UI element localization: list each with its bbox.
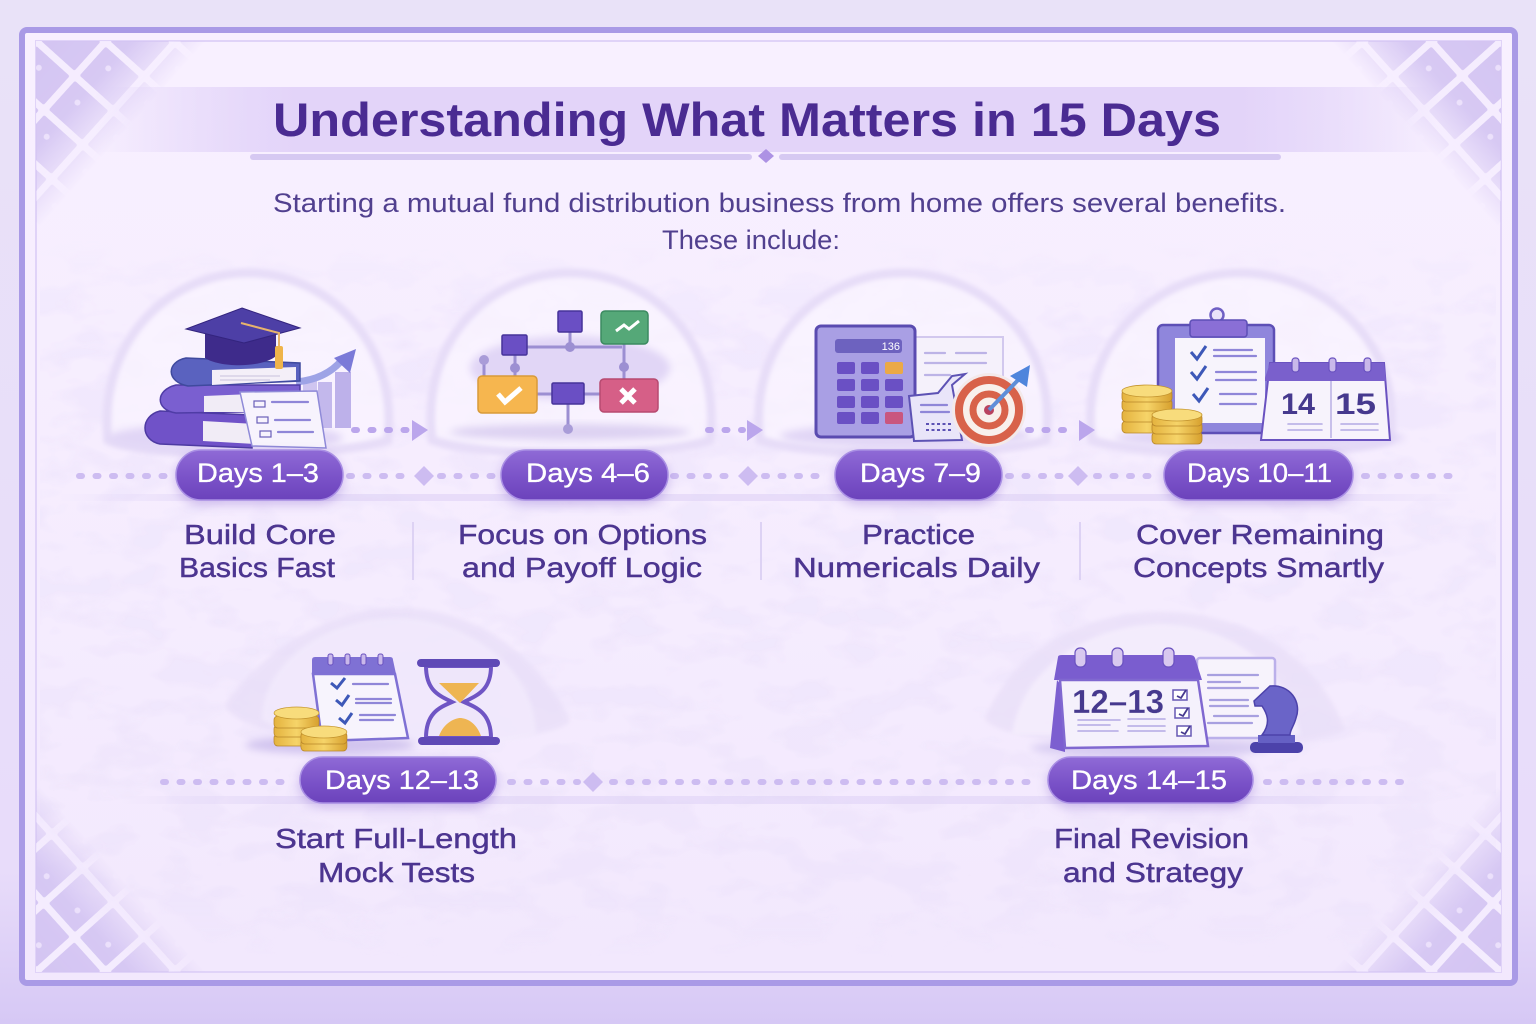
icon: coin stacks (1122, 385, 1202, 444)
pill: days 7-9 (835, 450, 1002, 500)
pill: days 7-9: Days 7–9 (860, 458, 981, 488)
icon: small note (909, 374, 965, 441)
icon: calendar 14 15: 14 (1281, 388, 1315, 421)
corner lattice: top left (36, 41, 206, 231)
icon: clipboard (1158, 308, 1274, 433)
icon: target with arrow (952, 365, 1030, 447)
panel: days 1-3 (107, 273, 389, 583)
dome highlight (1012, 624, 1300, 735)
icon: calendar 12-13: 12–13 (1072, 683, 1164, 720)
separator (760, 522, 762, 580)
intro text: These include: (662, 225, 840, 255)
label: Cover Remaining (1136, 519, 1384, 550)
ground shadow (245, 736, 415, 754)
corner lattice: bottom right (1331, 782, 1501, 972)
pill: days 1-3: Days 1–3 (197, 458, 319, 488)
title: Understanding What Matters in 15 Days (273, 93, 1221, 146)
ground shadow (1115, 427, 1405, 449)
ground shadow (1030, 740, 1270, 756)
dome backdrop (107, 273, 389, 454)
corner lattice: bottom left (36, 782, 206, 972)
icon: calculator (816, 326, 915, 437)
icon: hourglass (417, 659, 500, 745)
label: Mock Tests (318, 857, 475, 888)
pill: days 12-13: Days 12–13 (325, 765, 479, 795)
icon: checklist sheet (240, 391, 326, 448)
title band (95, 87, 1441, 152)
label: Practice (862, 519, 975, 550)
icon: document behind (1197, 658, 1275, 738)
title divider (250, 149, 1281, 163)
label (275, 823, 517, 888)
icon: stack of books (145, 358, 300, 448)
arrow: days 7-9 to days 10-11 (1028, 420, 1095, 441)
icon: document behind (914, 337, 1003, 397)
intro text: Starting a mutual fund distribution business from home offers several benefits. (273, 188, 1286, 218)
timeline: row 1 (79, 466, 1452, 486)
timeline: row 2 (163, 772, 1412, 792)
label (793, 519, 1040, 583)
pill: days 14-15: Days 14–15 (1071, 765, 1227, 795)
dome highlight (262, 618, 536, 749)
panel: days 10-11 (1090, 273, 1405, 583)
pill: days 4-6 (501, 450, 668, 500)
icon: growth chart and arrow (296, 349, 356, 428)
label: Final Revision (1054, 823, 1249, 854)
dome backdrop (431, 273, 711, 454)
pill: days 10-11: Days 10–11 (1187, 458, 1332, 488)
icon: graduation cap (186, 308, 300, 369)
label: Build Core (184, 519, 336, 550)
icon: checklist calendar (312, 654, 408, 741)
ground shadow (780, 424, 1030, 448)
separator (412, 522, 414, 580)
panel: days 14-15 (985, 612, 1345, 888)
dome backdrop (759, 273, 1047, 454)
pill: days 12-13 (300, 757, 496, 803)
arrow: days 4-6 to days 7-9 (708, 420, 763, 441)
icon: calendar 14 15: 15 (1335, 388, 1376, 421)
ground shadow (107, 423, 343, 453)
label (1133, 519, 1384, 583)
label (179, 519, 336, 583)
timeline band: row 1 (60, 494, 1470, 501)
icon: calendar 14 15 (1261, 358, 1390, 440)
icon: calculator: 136 (882, 341, 900, 353)
icon: calendar 12-13 (1050, 648, 1208, 752)
panel: days 12-13 (225, 608, 570, 888)
corner lattice: top right (1331, 41, 1501, 231)
intro text (273, 188, 1286, 255)
label: and Strategy (1063, 857, 1243, 888)
dome backdrop (985, 612, 1345, 748)
label (1054, 823, 1249, 888)
separator (1079, 522, 1081, 580)
pill: days 4-6: Days 4–6 (526, 458, 650, 488)
label (458, 519, 707, 583)
panel: days 4-6 (431, 273, 711, 583)
dome backdrop (1090, 273, 1392, 454)
label: Start Full-Length (275, 823, 517, 854)
pill: days 1-3 (176, 450, 343, 500)
icon: flowchart (450, 311, 690, 440)
label: Basics Fast (179, 552, 335, 583)
pill: days 10-11 (1164, 450, 1353, 500)
label: Numericals Daily (793, 552, 1040, 583)
icon: chess knight (1250, 686, 1303, 753)
watercolor texture (40, 240, 1496, 960)
label: Concepts Smartly (1133, 552, 1384, 583)
dome backdrop (225, 608, 570, 743)
label: and Payoff Logic (462, 552, 702, 583)
pill: days 14-15 (1048, 757, 1253, 803)
timeline band: row 2 (120, 796, 1420, 804)
icon: coin stacks (274, 707, 347, 751)
arrow: days 1-3 to days 4-6 (354, 420, 428, 441)
label: Focus on Options (458, 519, 707, 550)
panel: days 7-9 (759, 273, 1047, 583)
